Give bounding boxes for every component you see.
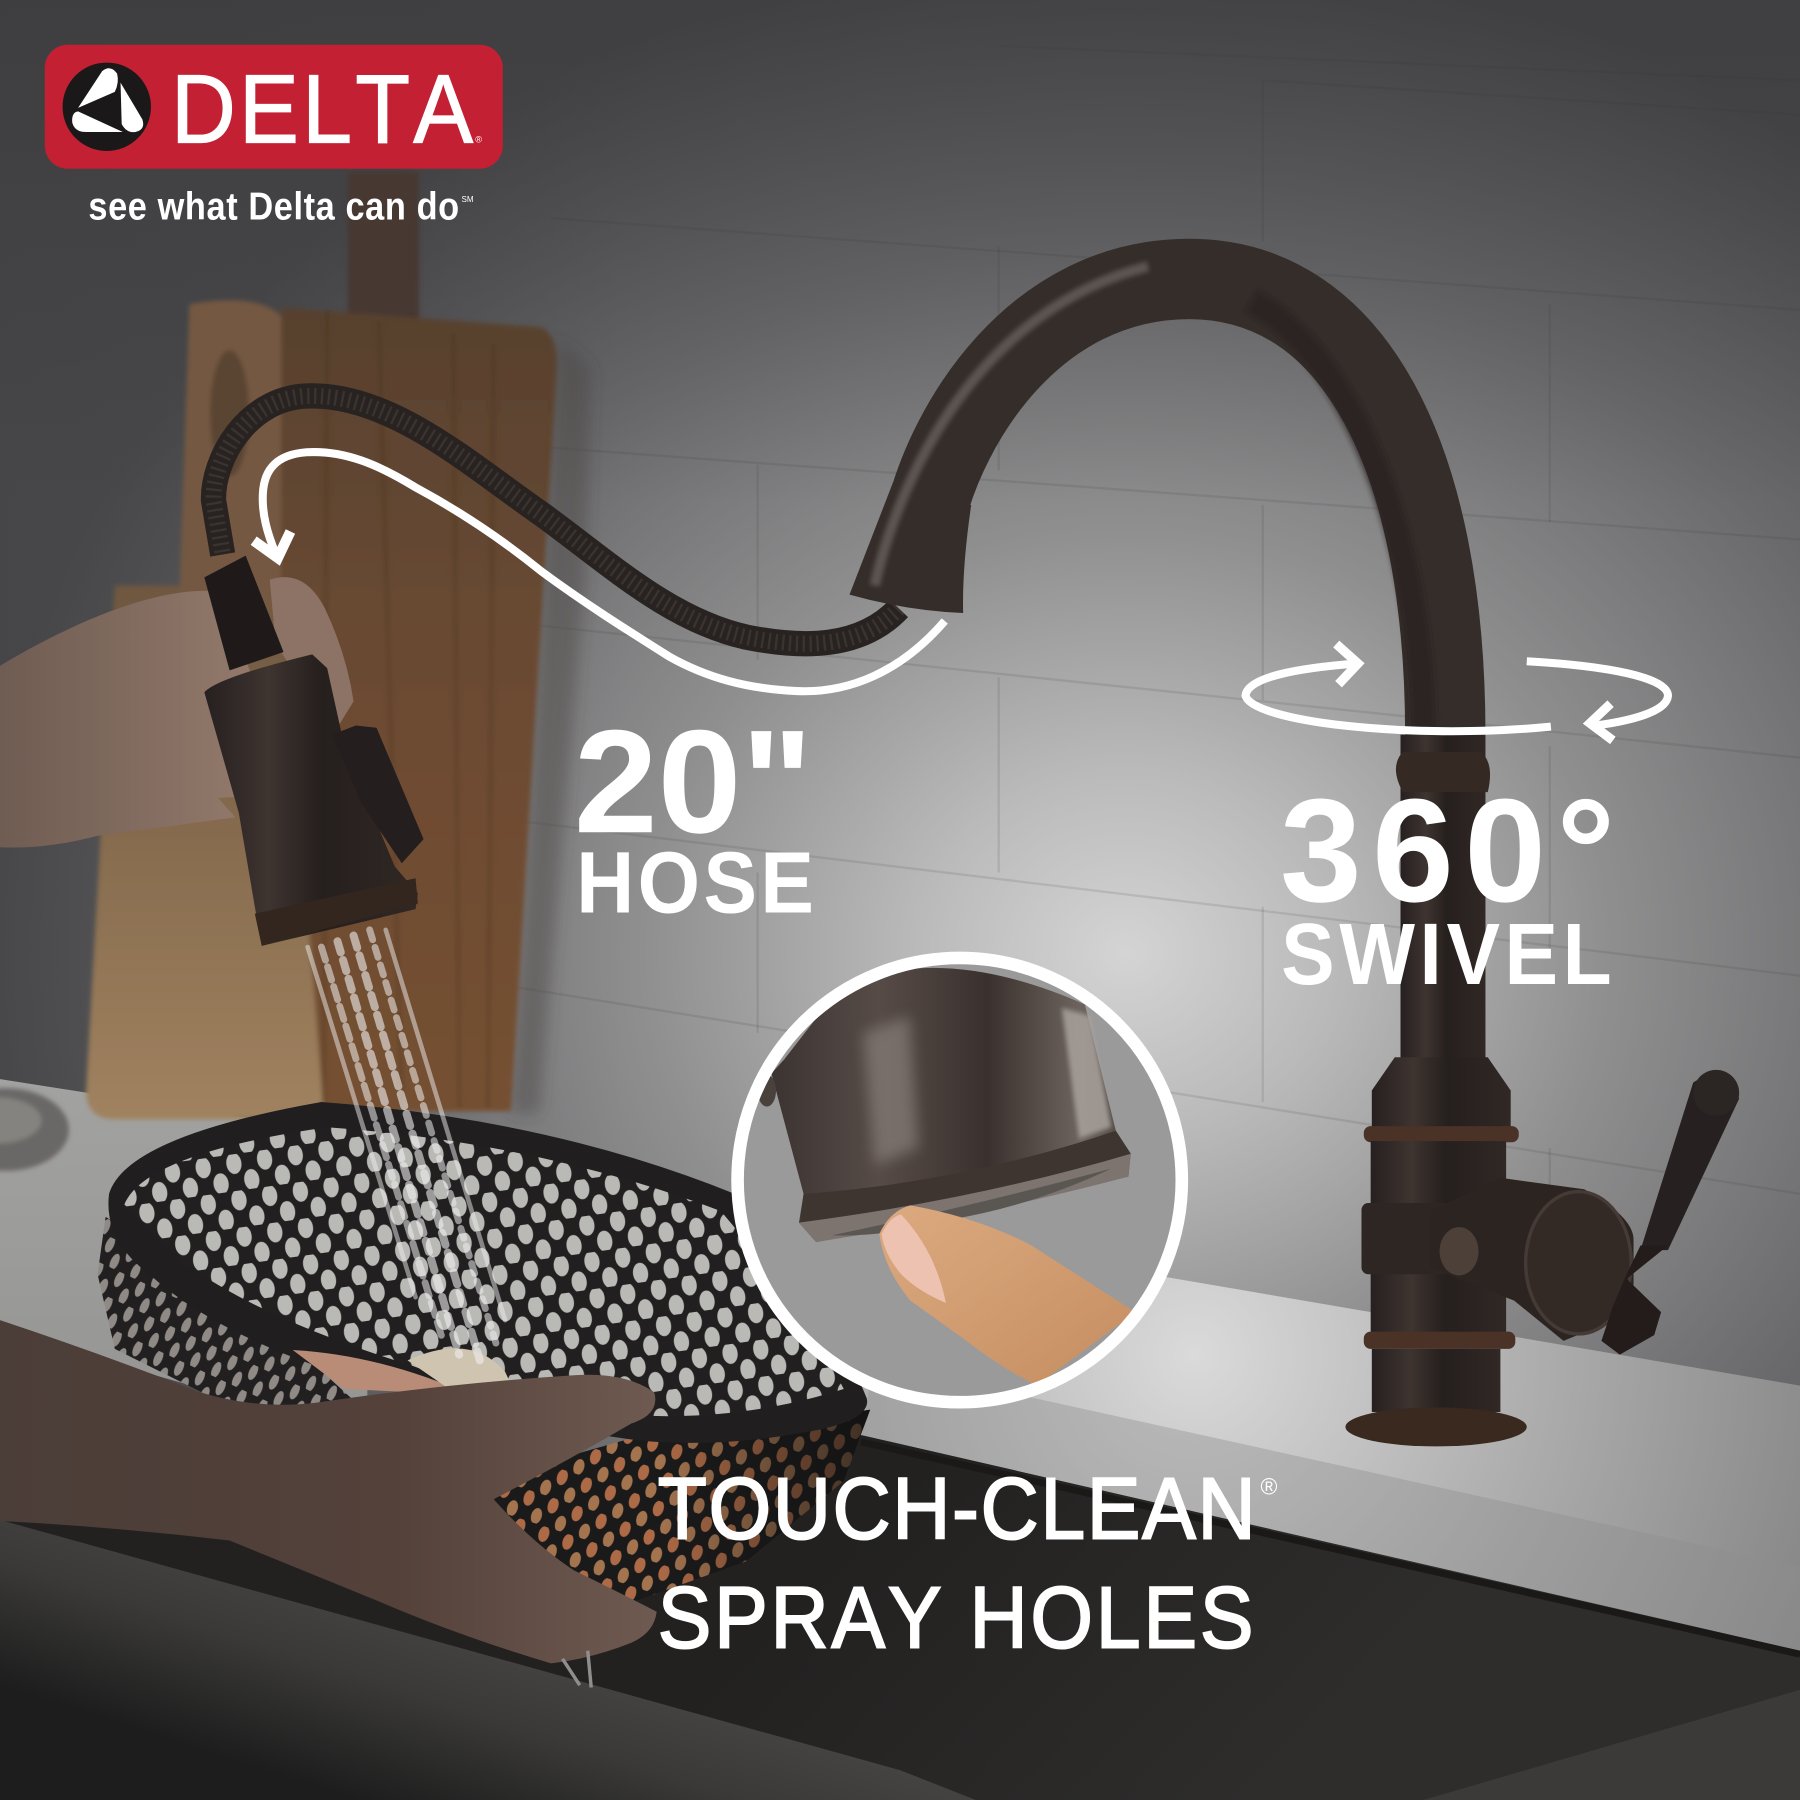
plate: [0, 1088, 69, 1171]
logo mark: [63, 63, 151, 151]
callout: touch-clean spray holes: SPRAY HOLES: [658, 1568, 1253, 1666]
callout: touch-clean spray holes: TOUCH-CLEAN: [658, 1459, 1256, 1557]
pull-down spray head: [204, 556, 424, 946]
tagline: see what Delta can do: [88, 184, 459, 228]
upper hand behind spray head: [0, 577, 404, 848]
callout: 360 degree swivel: 360°: [1280, 769, 1615, 933]
water spray: [308, 930, 505, 1360]
arrows: swivel: [1246, 644, 1668, 740]
logo: [45, 45, 503, 228]
faucet spout: [849, 266, 1445, 735]
callout: touch-clean spray holes: [658, 1459, 1277, 1666]
sink basin: [0, 1435, 1800, 1800]
logo wordmark: DELTA: [171, 54, 474, 163]
arrow: hose length: [254, 452, 945, 691]
callout: 360 degree swivel: SWIVEL: [1281, 905, 1612, 1003]
cutting boards: [86, 172, 591, 1119]
countertop: [0, 1079, 1800, 1654]
callout: 20 inch hose: 20": [574, 700, 813, 864]
fingertip: [879, 1205, 1135, 1386]
logo: ®: [475, 134, 482, 144]
logo badge: [45, 45, 503, 169]
bowl outer mesh, left side: [98, 1217, 379, 1423]
apple slices: [293, 1348, 597, 1418]
braided hose: [213, 396, 899, 644]
callout: 20 inch hose: HOSE: [576, 834, 814, 931]
nozzle body: [771, 968, 1131, 1242]
bowl outer mesh, right side: [482, 1410, 870, 1603]
water below hand: [562, 1651, 591, 1688]
colander bowl: [98, 1102, 870, 1603]
inset: touch-clean nozzle: [738, 958, 1182, 1402]
callout: 20 inch hose: [574, 700, 814, 931]
lower hand holding bowl: [0, 1320, 657, 1663]
front counter edge: [0, 1520, 976, 1800]
faucet body and handle: [1345, 735, 1739, 1446]
bowl rim and inner mesh: [108, 1102, 867, 1443]
logo: SM: [461, 195, 474, 204]
callout: touch-clean spray holes: ®: [1260, 1474, 1277, 1500]
